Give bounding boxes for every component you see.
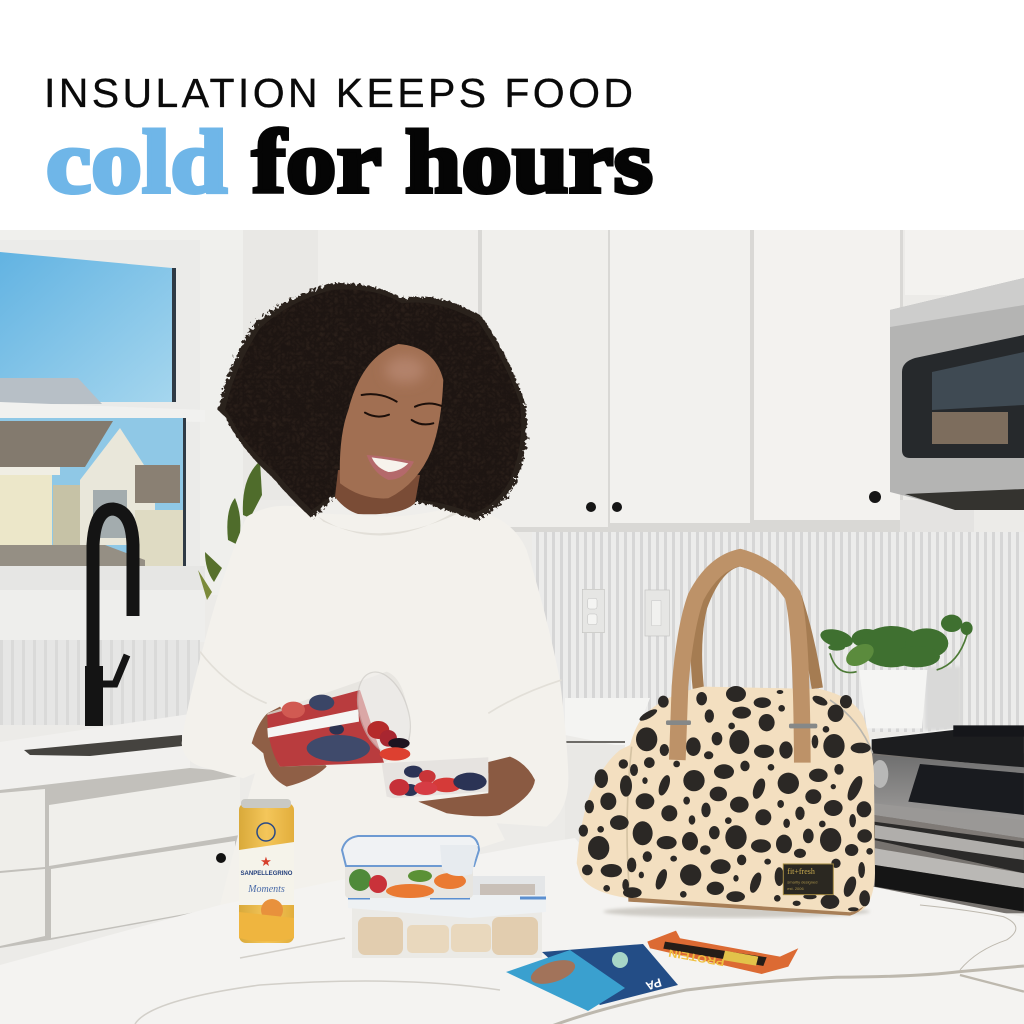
face: [340, 344, 443, 498]
potted plant: [818, 615, 973, 730]
brand label: [783, 864, 833, 895]
window: [0, 230, 243, 642]
left hand: [252, 707, 327, 787]
brand label: smartly designed: [787, 879, 817, 884]
lower fruit box: [382, 757, 488, 798]
woman: [182, 283, 568, 905]
upper cabinets: [243, 230, 1024, 535]
bottom trim: [628, 897, 864, 916]
lunch bag: [577, 557, 875, 918]
zipper: [830, 700, 873, 753]
marble island: [0, 838, 1024, 1024]
heading: cold for hours: cold: [46, 113, 227, 212]
wall outlets: [582, 589, 669, 636]
soda can: SANPELLEGRINO: [240, 870, 292, 877]
sweater: [182, 506, 568, 905]
faucet: [93, 509, 133, 726]
right counter and cabinet: [565, 698, 650, 845]
bottom container: [348, 876, 546, 958]
handle buckles: [666, 720, 817, 728]
right counter: [863, 728, 954, 753]
brows and eyes: [362, 394, 442, 424]
right hand: [418, 757, 535, 816]
collar: [318, 512, 458, 535]
hands and fruit containers: [252, 665, 535, 816]
sleeve seams: [200, 652, 562, 713]
scene right of the bag, drawn at 3x: [582, 589, 1024, 913]
top container: [342, 836, 479, 898]
heading: insulation keeps food: INSULATION KEEPS FOOD: [44, 70, 633, 116]
snack packets: PA: [644, 975, 663, 993]
heading: cold for hours: [46, 113, 653, 212]
front handles: [677, 557, 802, 763]
neck: [335, 470, 420, 514]
snack packets: [506, 944, 678, 1011]
brand label: fit+fresh: [787, 867, 815, 876]
spots: [579, 686, 873, 911]
marble veins: [550, 905, 1024, 1024]
bag shadow: [603, 906, 870, 918]
stove: [872, 725, 1024, 913]
soda can: [239, 799, 294, 943]
kitchen background: [0, 230, 1024, 1024]
pocket seam: [627, 747, 632, 897]
backsplash: [532, 532, 1024, 732]
brand label: est. 2006: [787, 886, 804, 891]
protein bar: PROTEIN: [668, 946, 726, 967]
soda can: ★: [260, 854, 272, 869]
snack containers: [342, 836, 546, 958]
heading: cold for hours: for hours: [252, 113, 653, 212]
smile: [367, 455, 414, 480]
bag body: [577, 687, 875, 915]
soda can: Moments: [247, 884, 285, 895]
header background: [0, 0, 1024, 230]
left counter and cabinets: [0, 714, 240, 948]
microwave: [890, 278, 1024, 510]
back handle: [696, 561, 817, 688]
tilted fruit cup: [267, 665, 420, 767]
left backsplash: [0, 640, 200, 725]
snake plant: [198, 461, 262, 600]
protein bar: [647, 931, 798, 974]
hair: [218, 283, 527, 520]
